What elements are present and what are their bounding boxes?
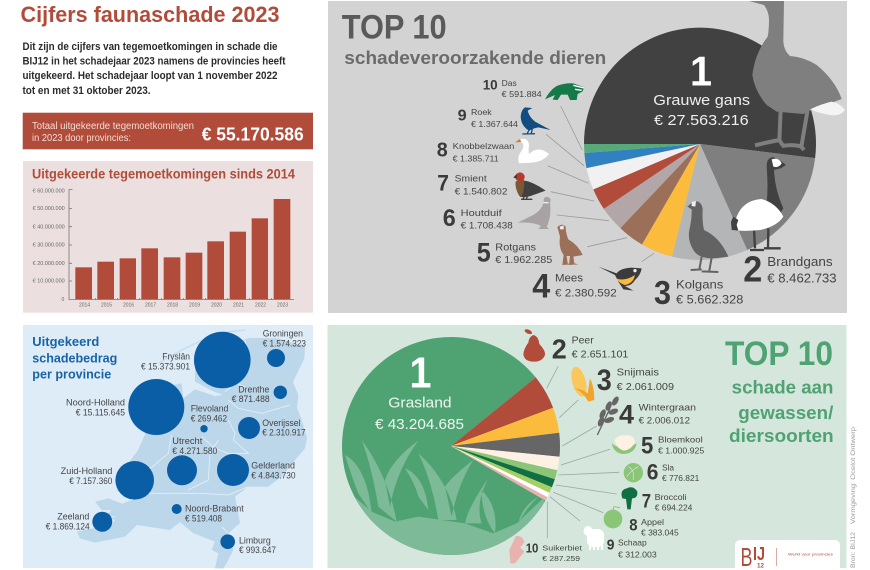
rank 9 label	[458, 107, 518, 129]
rank 7 label: Smient	[455, 174, 487, 185]
bar chart: 2023	[277, 303, 288, 309]
rank 3 crops: Snijmais	[617, 368, 659, 379]
crop icons	[509, 328, 594, 563]
rank 7 crops	[642, 491, 693, 513]
map heading: schadebedrag	[32, 351, 117, 366]
icon: lettuce	[624, 463, 643, 482]
intro text: BIJ12 in het schadejaar 2023 namens de provincies heeft	[22, 56, 286, 68]
province bubbles	[92, 332, 287, 549]
rank 5 crops: Bloemkool	[658, 434, 703, 444]
province labels: € 1.869.124	[46, 522, 90, 532]
province labels: € 4.843.730	[251, 471, 296, 481]
province labels: Noord-Brabant	[185, 504, 244, 514]
title: Cijfers faunaschade 2023	[20, 2, 280, 27]
province labels: € 4.271.580	[172, 446, 217, 456]
rank 10 label: Das	[502, 79, 517, 88]
heading: top 10: TOP 10	[342, 8, 447, 46]
credit text: Vormgeving: Ocelot Ontwerp	[850, 427, 857, 524]
icon: wood pigeon	[518, 197, 551, 229]
intro text: Dit zijn de cijfers van tegemoetkomingen in schade die	[22, 41, 278, 53]
icon: sugar beet	[509, 536, 524, 563]
rank 1 label crops: 1	[410, 349, 432, 398]
intro text	[22, 41, 286, 97]
rank 5 crops	[641, 432, 705, 459]
credit text: Bron: BIJ12	[850, 532, 857, 568]
rank 6 label: € 1.708.438	[461, 220, 513, 231]
bar chart: € 30.000.000	[33, 243, 65, 249]
heading: top 10 crops: schade aan	[732, 377, 833, 397]
rank 5 label: Rotgans	[495, 242, 536, 254]
rank 10 crops	[526, 541, 583, 563]
icon: swan	[515, 139, 549, 163]
province labels: Utrecht	[172, 436, 203, 446]
panel: bar chart since 2014	[23, 161, 313, 313]
leader lines	[547, 366, 619, 538]
rank 4 label: 4	[532, 268, 550, 306]
rank 8 label: € 1.385.711	[453, 153, 499, 163]
icon: white-fronted goose	[687, 201, 728, 272]
rank 9 label: € 1.367.644	[471, 119, 518, 129]
rank 6 crops: 6	[647, 459, 658, 484]
rank 10 crops: Suikerbiet	[542, 544, 583, 553]
rank 7 crops: 7	[642, 491, 651, 512]
icon: wigeon	[513, 172, 546, 199]
province labels: Zuid-Holland	[61, 466, 112, 476]
bar chart: 2015	[101, 303, 112, 309]
rank 1 label: Grauwe gans	[653, 92, 750, 109]
bar chart: 2022	[255, 303, 266, 309]
logo: IJ	[753, 544, 765, 564]
bar chart: 2016	[123, 303, 134, 309]
rank 2 label: € 8.462.733	[767, 272, 837, 286]
panel: top 10 animals	[328, 1, 847, 313]
rank 8 label: 8	[437, 140, 448, 162]
rank 3 label: Kolgans	[676, 277, 723, 291]
rank 3 label	[654, 274, 744, 311]
rank 2 crops	[552, 333, 629, 364]
rank 4 label: € 2.380.592	[555, 288, 617, 300]
heading: top 10 crops: TOP 10	[725, 335, 833, 373]
map of the Netherlands	[77, 330, 307, 568]
rank 9 crops	[607, 536, 657, 560]
bar chart: 2014	[79, 303, 90, 309]
province labels: € 871.488	[232, 394, 270, 404]
bar chart: € 10.000.000	[33, 279, 65, 285]
rank 9 crops: € 312.003	[618, 550, 657, 560]
province labels: Fryslân	[162, 351, 190, 361]
icon: broccoli	[621, 487, 637, 509]
rank 6 label: 6	[443, 205, 456, 232]
rank 4 crops: € 2.006.012	[639, 415, 690, 426]
heading: top 10 crops: diersoorten	[729, 426, 834, 446]
animal icons left	[513, 83, 584, 265]
rank 10 crops: € 287.259	[542, 554, 580, 563]
rank 4 label: Mees	[555, 273, 584, 285]
icon: barnacle goose	[731, 157, 786, 250]
rank 2 label: Brandgans	[767, 255, 833, 269]
rank 5 label	[477, 238, 552, 268]
province labels: € 269.462	[191, 413, 227, 423]
rank 2 crops: Peer	[572, 335, 594, 346]
credit text	[850, 427, 857, 568]
logo: Werkt voor provincies	[788, 552, 833, 557]
rank 10 crops: 10	[526, 541, 538, 556]
logo: 12	[757, 562, 764, 569]
rank 3 crops: € 2.061.009	[617, 382, 674, 393]
icon: sheep	[584, 526, 604, 550]
icon: corn	[569, 365, 594, 402]
pie chart: crops	[342, 337, 560, 555]
rank 5 crops: € 1.000.925	[658, 445, 705, 455]
rank 10 label: 10	[483, 76, 498, 92]
bar chart: 2020	[211, 303, 222, 309]
bar chart: 2018	[167, 303, 178, 309]
bar chart: 2019	[189, 303, 200, 309]
province labels: Gelderland	[251, 461, 295, 471]
heading: top 10 crops: gewassen/	[738, 403, 833, 423]
bar chart: 0	[62, 297, 64, 303]
rank 3 label: € 5.662.328	[676, 292, 744, 306]
rank 6 crops: Sla	[662, 462, 674, 472]
rank 1 label crops: € 43.204.685	[375, 416, 464, 433]
rank 3 crops	[597, 364, 674, 397]
total amount box: in 2023 door provincies:	[32, 133, 131, 144]
panel: top 10 crops	[328, 325, 846, 570]
chart heading: Uitgekeerde tegemoetkomingen sinds 2014	[32, 166, 295, 182]
bar chart: 2017	[145, 303, 156, 309]
rank 7 label: € 1.540.802	[455, 186, 507, 197]
province labels: Limburg	[239, 536, 271, 546]
icon: brent goose	[557, 225, 583, 265]
icon: rook	[521, 107, 551, 134]
subheading animals: schadeveroorzakende dieren	[344, 48, 606, 68]
rank 6 crops	[647, 459, 700, 484]
province labels	[46, 329, 306, 555]
rank 8 crops: 8	[629, 515, 638, 534]
bar chart: € 60.000.000	[33, 189, 65, 195]
intro text: tot en met 31 oktober 2023.	[22, 85, 150, 97]
bar chart	[33, 189, 294, 309]
province labels: Overijssel	[262, 418, 301, 428]
icon: badger	[545, 83, 584, 100]
rank 9 crops: 9	[607, 536, 614, 553]
icon: great tit	[598, 267, 642, 291]
rank 3 crops: 3	[597, 364, 612, 397]
icon: wheat	[596, 395, 620, 435]
rank 3 label: 3	[654, 274, 671, 311]
rank 2 label	[743, 249, 837, 290]
rank 1 label: € 27.563.216	[654, 112, 749, 129]
province labels: € 15.115.645	[76, 408, 125, 418]
bar chart: € 20.000.000	[33, 261, 65, 267]
rank 4 crops: 4	[619, 399, 634, 429]
rank 6 label: Houtduif	[461, 208, 502, 219]
total amount box: € 55.170.586	[202, 125, 304, 145]
map heading: Uitgekeerd	[32, 334, 99, 349]
rank 5 crops: 5	[641, 432, 653, 459]
bar chart: € 40.000.000	[33, 224, 65, 230]
rank 8 label: Knobbelzwaan	[453, 141, 515, 151]
icon: apple	[604, 507, 622, 528]
rank 4 crops	[619, 399, 696, 429]
rank 1 label: 1	[690, 48, 712, 95]
rank 8 crops: Appel	[641, 517, 664, 527]
map heading	[32, 334, 117, 382]
rank 10 label: € 591.884	[502, 90, 542, 99]
rank 9 label: 9	[458, 108, 467, 125]
logo	[735, 540, 840, 570]
rank 4 crops: Wintergraan	[639, 403, 696, 414]
icon: cauliflower	[612, 435, 637, 454]
rank 9 crops: Schaap	[618, 538, 647, 548]
map heading: per provincie	[32, 367, 111, 382]
rank 2 label: 2	[743, 249, 762, 290]
province labels: € 993.647	[239, 545, 276, 555]
rank 6 label	[443, 205, 513, 232]
rank 9 label: Roek	[471, 107, 492, 117]
rank 1 label	[653, 48, 750, 129]
province labels: Drenthe	[238, 384, 269, 394]
rank 5 label: € 1.962.285	[495, 254, 552, 266]
province labels: € 2.310.917	[262, 428, 306, 438]
rank 2 crops: 2	[552, 333, 567, 364]
grass illustration	[345, 440, 544, 555]
province labels: Flevoland	[191, 404, 228, 414]
rank 1 label crops: Grasland	[388, 395, 452, 412]
rank 6 crops: € 776.821	[662, 473, 700, 483]
province labels: Zeeland	[57, 512, 89, 522]
panel: province map	[23, 325, 313, 568]
leader lines	[546, 106, 654, 262]
pie chart: animals	[584, 28, 816, 260]
rank 2 crops: € 2.651.101	[572, 349, 629, 360]
province labels: € 519.408	[185, 513, 222, 523]
rank 7 crops: Broccoli	[655, 492, 687, 502]
province labels: € 1.574.323	[263, 339, 306, 349]
province labels: Groningen	[263, 329, 303, 339]
province labels: Noord-Holland	[66, 398, 125, 408]
rank 7 label	[437, 171, 507, 197]
rank 10 label	[483, 76, 542, 99]
heading: top 10 crops	[725, 335, 834, 446]
total amount box	[23, 113, 313, 149]
rank 7 label: 7	[437, 171, 449, 196]
rank 8 crops: € 383.045	[641, 528, 679, 538]
rank 8 crops	[629, 515, 679, 538]
rank 1 label crops	[375, 349, 464, 433]
bar chart: 2021	[233, 303, 244, 309]
rank 5 label: 5	[477, 238, 491, 268]
total amount box: Totaal uitgekeerde tegemoetkomingen	[32, 121, 194, 132]
province labels: € 15.373.901	[141, 361, 190, 371]
intro text: uitgekeerd. Het schadejaar loopt van 1 november 2022	[22, 70, 278, 82]
province labels: € 7.157.360	[69, 476, 112, 486]
bar chart: € 50.000.000	[33, 206, 65, 212]
rank 8 label	[437, 140, 515, 163]
icon: greylag goose	[749, 1, 845, 150]
rank 7 crops: € 694.224	[655, 503, 693, 513]
rank 4 label	[532, 268, 617, 306]
icon: pear	[523, 328, 545, 362]
